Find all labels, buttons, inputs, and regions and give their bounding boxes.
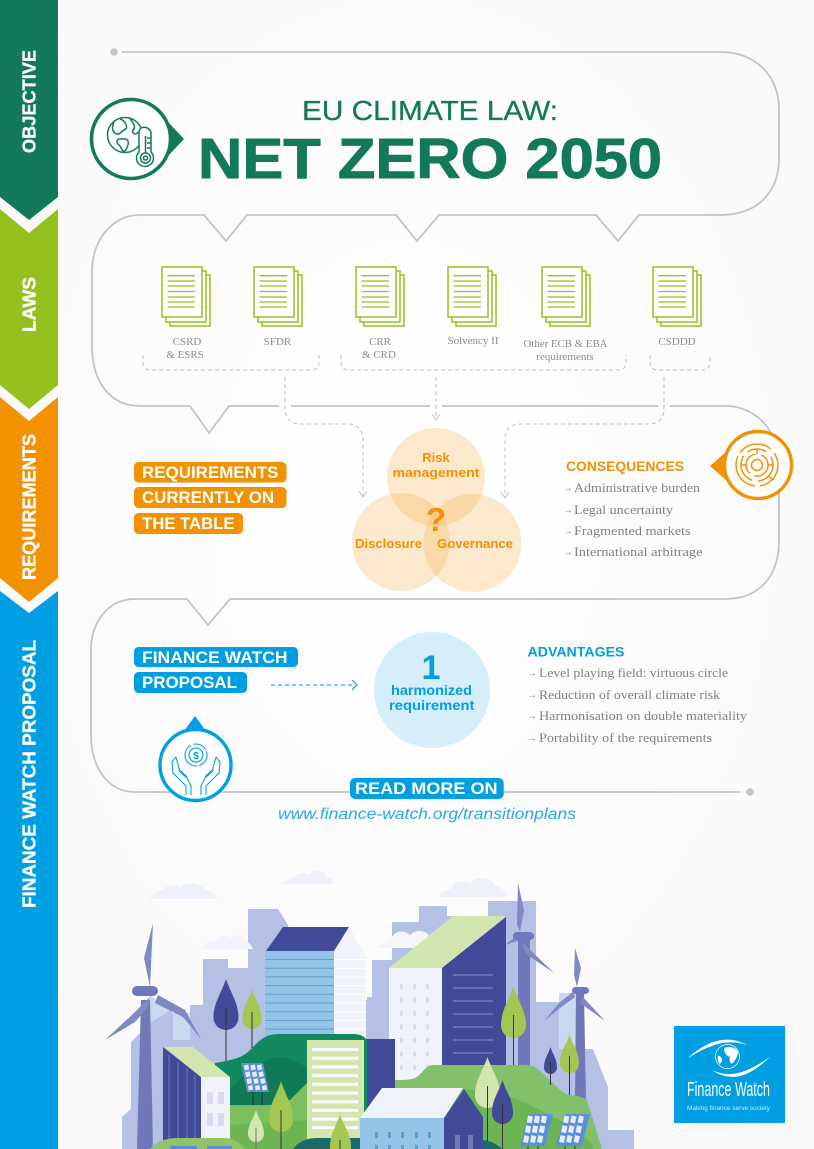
front left hill with solar panels: [150, 1138, 245, 1149]
sidebar section: objective: OBJECTIVE: [18, 50, 40, 153]
blue tower: [265, 927, 366, 1043]
consequences list: →: [563, 526, 573, 537]
law document: CRR and CRD: [356, 267, 404, 361]
right wind turbine one: [505, 883, 554, 1067]
central navy block: [364, 1039, 395, 1149]
solar panel on hill: [241, 1063, 269, 1105]
law document: Solvency II: Solvency II: [447, 335, 499, 347]
law document: SFDR: SFDR: [264, 336, 292, 348]
advantages list: ADVANTAGES: [528, 644, 624, 660]
background skyline: [122, 901, 634, 1149]
left wind turbine: [105, 923, 201, 1149]
consequences list: CONSEQUENCES: [566, 458, 684, 474]
venn diagram: ?: [426, 501, 446, 538]
left building: [163, 1047, 230, 1149]
requirements label: THE TABLE: [142, 514, 234, 533]
consequences list: →: [563, 547, 573, 558]
advantages list: →: [527, 711, 537, 722]
advantages list: →: [527, 668, 537, 679]
consequences list: →: [563, 483, 573, 494]
logo: Finance Watch: Making finance serve society: [687, 1106, 770, 1112]
requirements label: CURRENTLY ON: [142, 488, 274, 507]
sidebar section: finance watch proposal: [0, 591, 58, 1149]
harmonized requirement circle: harmonized: [391, 682, 472, 698]
finance watch proposal label: PROPOSAL: [142, 673, 237, 692]
right wind turbine two: [544, 948, 605, 1100]
requirements label: REQUIREMENTS: [142, 463, 278, 482]
arrow: proposal to requirement: [271, 680, 357, 690]
consequences list: [563, 458, 703, 559]
sidebar section: objective: [0, 0, 58, 220]
venn diagram: Disclosure: [355, 536, 422, 551]
finance watch proposal label: [134, 647, 298, 693]
harmonized requirement circle: 1: [422, 649, 440, 687]
icon: hands holding coin: [160, 716, 231, 800]
advantages list: Reduction of overall climate risk: [539, 687, 721, 702]
front trees: [248, 986, 579, 1149]
advantages list: Portability of the requirements: [539, 730, 712, 745]
clouds over skyline: [202, 935, 253, 949]
cream striped building: [307, 1040, 364, 1140]
right building: [389, 916, 506, 1083]
icon: hands holding coin: $: [193, 751, 199, 762]
requirements label: [134, 462, 286, 534]
small house: [360, 1088, 483, 1149]
advantages list: →: [527, 733, 537, 744]
venn diagram: management: [392, 465, 480, 480]
dashed brackets and connector arrows: [143, 355, 710, 498]
law document: other ECB and EBA requirements: requirements: [536, 351, 594, 363]
consequences list: Fragmented markets: [574, 523, 690, 538]
law document: CSDDD: [653, 267, 701, 348]
law document: Solvency II: [447, 267, 499, 347]
law document: CSDDD: CSDDD: [658, 336, 696, 348]
harmonized requirement circle: requirement: [389, 697, 475, 713]
icon: globe with thermometer: [92, 100, 184, 178]
harmonized requirement circle: [374, 632, 490, 748]
right green hill: [395, 1065, 602, 1149]
sidebar section: requirements: [0, 397, 58, 602]
law document: other ECB and EBA requirements: [524, 267, 608, 363]
advantages list: →: [527, 690, 537, 701]
law document: CSRD and ESRS: [162, 267, 210, 361]
clouds: [150, 870, 508, 899]
consequences list: →: [563, 505, 573, 516]
tall trees behind hill: [214, 979, 262, 1063]
sidebar section: laws: LAWS: [18, 277, 40, 332]
solar panels on right hill: [520, 1114, 590, 1149]
read more pill: READ MORE ON: [355, 779, 498, 798]
venn diagram: [352, 428, 522, 592]
law document: CRR and CRD: CRR: [369, 336, 392, 348]
illustration: green city: [105, 870, 634, 1149]
law document: SFDR: [254, 267, 302, 348]
sidebar section: laws: [0, 209, 58, 409]
consequences list: International arbitrage: [574, 544, 703, 559]
venn diagram: Risk: [422, 450, 450, 465]
consequences list: Legal uncertainty: [574, 502, 674, 517]
icon: maze: [710, 432, 792, 498]
advantages list: Level playing field: virtuous circle: [539, 665, 728, 680]
law document: CSRD and ESRS: & ESRS: [166, 349, 204, 361]
central green hill: [215, 1034, 367, 1149]
law document: CSRD and ESRS: CSRD: [173, 336, 201, 348]
sidebar section: requirements: REQUIREMENTS: [18, 434, 40, 580]
law document: CRR and CRD: & CRD: [362, 349, 396, 361]
title: NET ZERO 2050: [198, 127, 662, 191]
advantages list: [527, 644, 748, 745]
sidebar section: finance watch proposal: FINANCE WATCH PROPOSAL: [18, 640, 40, 908]
advantages list: Harmonisation on double materiality: [539, 708, 748, 723]
logo: Finance Watch: [674, 1026, 785, 1123]
venn diagram: Governance: [437, 536, 513, 551]
website url: www.finance-watch.org/transitionplans: [278, 806, 576, 823]
finance watch proposal label: FINANCE WATCH: [142, 648, 288, 667]
law document: other ECB and EBA requirements: Other ECB & EBA: [524, 338, 608, 350]
consequences list: Administrative burden: [574, 480, 701, 495]
connecting speech-bubble line: [91, 48, 779, 796]
title: EU CLIMATE LAW:: [302, 95, 558, 126]
title: [198, 95, 662, 191]
